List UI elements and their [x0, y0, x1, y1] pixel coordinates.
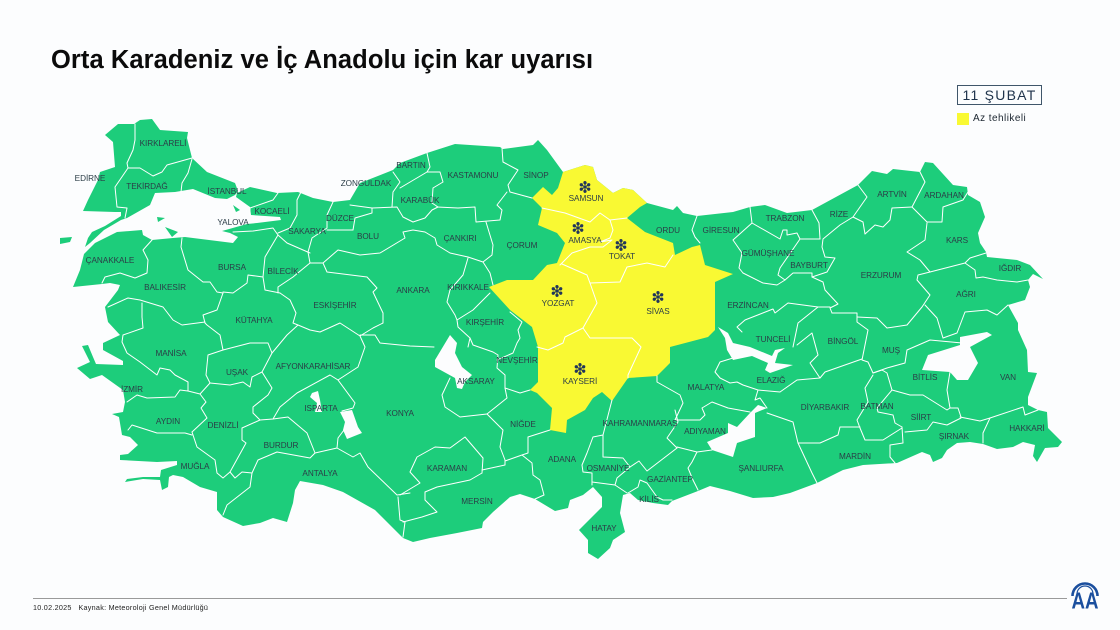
province labels: ŞIRNAK [939, 432, 970, 441]
province labels: BOLU [357, 232, 379, 241]
province labels [75, 138, 1045, 533]
province labels: BATMAN [860, 402, 894, 411]
province labels: SİVAS [646, 306, 670, 316]
province labels: SAMSUN [569, 194, 603, 203]
province borders [102, 124, 1038, 537]
province labels: İSTANBUL [207, 186, 247, 196]
icon: snowflake Yozgat [552, 286, 562, 296]
province labels: AMASYA [568, 236, 602, 245]
province labels: ÇANAKKALE [86, 256, 135, 265]
province labels: ARTVİN [877, 189, 907, 199]
province labels: ERZURUM [861, 271, 902, 280]
province labels: KAYSERİ [563, 376, 597, 386]
province labels: SİİRT [911, 412, 931, 422]
province labels: YALOVA [217, 218, 249, 227]
province labels: MALATYA [688, 383, 725, 392]
province labels: DÜZCE [326, 213, 355, 223]
green landmass: Anatolia [73, 140, 1062, 559]
province labels: ADANA [548, 455, 577, 464]
province labels: DİYARBAKIR [801, 402, 849, 412]
province labels: KÜTAHYA [235, 315, 273, 325]
legend: hazard key: Az tehlikeli [973, 113, 1026, 124]
province labels: BURDUR [264, 441, 298, 450]
province labels: BAYBURT [790, 261, 828, 270]
legend: date box [957, 85, 1042, 105]
province labels: KIRKLARELİ [140, 138, 186, 148]
province labels: MANİSA [155, 348, 187, 358]
province labels: MUŞ [882, 346, 901, 355]
province labels: DENİZLİ [207, 420, 239, 430]
icon: snowflake Kayseri [575, 364, 585, 374]
province labels: ZONGULDAK [341, 179, 392, 188]
province labels: YOZGAT [542, 299, 574, 308]
icon: snowflake Sivas [653, 292, 663, 302]
lake: Tuz [435, 335, 472, 389]
province labels: KIRIKKALE [447, 283, 490, 292]
province labels: OSMANİYE [587, 463, 630, 473]
province labels: ORDU [656, 226, 680, 235]
snowflake icons [552, 182, 663, 374]
province labels: RİZE [830, 209, 849, 219]
province labels: ELAZIĞ [757, 375, 785, 385]
province labels: TEKİRDAĞ [126, 181, 168, 191]
legend: date box: 11 ŞUBAT [962, 87, 1037, 103]
footer rule [33, 598, 1067, 599]
province labels: KARS [946, 236, 969, 245]
province labels: MARDİN [839, 451, 871, 461]
province labels: AFYONKARAHİSAR [276, 361, 351, 371]
province labels: KIRŞEHİR [466, 317, 504, 327]
lake: Beyşehir [340, 410, 362, 439]
province labels: TUNCELİ [756, 334, 790, 344]
province labels: SAKARYA [288, 227, 326, 236]
province labels: ANTALYA [302, 469, 338, 478]
yellow warning region [489, 165, 733, 433]
province labels: AKSARAY [457, 377, 495, 386]
footer: date and source: 10.02.2025 Kaynak: Meteoroloji Genel Müdürlüğü [33, 603, 208, 612]
title: Orta Karadeniz ve İç Anadolu için kar uyarısı [51, 46, 593, 74]
province labels: ANKARA [396, 286, 430, 295]
province labels: VAN [1000, 373, 1016, 382]
province labels: AĞRI [956, 289, 976, 299]
province labels: ARDAHAN [924, 191, 964, 200]
province labels: KOCAELİ [254, 206, 290, 216]
province labels: TOKAT [609, 252, 635, 261]
province labels: HATAY [591, 524, 617, 533]
province labels: KONYA [386, 409, 414, 418]
province labels: BİLECİK [267, 266, 299, 276]
province labels: ERZİNCAN [727, 300, 769, 310]
islands [60, 205, 240, 244]
province labels: KİLİS [639, 494, 659, 504]
icon: snowflake Samsun [580, 182, 590, 192]
province labels: ŞANLIURFA [738, 464, 784, 473]
province labels: AYDIN [156, 417, 180, 426]
province labels: NEVŞEHİR [496, 355, 538, 365]
province labels: ÇORUM [507, 241, 538, 250]
province labels: TRABZON [766, 214, 805, 223]
province labels: HAKKARİ [1009, 423, 1045, 433]
icon: snowflake Amasya [573, 223, 583, 233]
province labels: ISPARTA [304, 404, 338, 413]
province labels: BİNGÖL [828, 336, 859, 346]
province labels: SİNOP [523, 170, 549, 180]
province labels: ÇANKIRI [444, 234, 476, 243]
lake: Keban [718, 327, 793, 373]
province labels: MERSİN [461, 496, 493, 506]
province labels: KAHRAMANMARAŞ [603, 419, 678, 428]
province labels: KARAMAN [427, 464, 467, 473]
province labels: GÜMÜŞHANE [742, 248, 795, 258]
province labels: ESKİŞEHİR [313, 300, 357, 310]
icon: snowflake Tokat [616, 240, 626, 250]
province labels: KASTAMONU [448, 171, 499, 180]
lake: Van [922, 332, 992, 380]
province labels: BALIKESİR [144, 282, 186, 292]
province labels: BURSA [218, 263, 247, 272]
green landmass: Thrace [83, 119, 238, 247]
province labels: UŞAK [226, 368, 249, 377]
province labels: MUĞLA [181, 461, 210, 471]
lake: Atatürk Dam [707, 405, 767, 457]
province labels: GAZİANTEP [647, 474, 694, 484]
province labels: EDİRNE [75, 173, 106, 183]
province labels: ADIYAMAN [684, 427, 726, 436]
province labels: NİĞDE [510, 419, 536, 429]
province labels: İZMİR [121, 384, 143, 394]
province labels: IĞDIR [999, 263, 1021, 273]
province labels: BİTLİS [913, 372, 938, 382]
province labels: KARABÜK [401, 195, 440, 205]
lake: Eğirdir [310, 391, 322, 412]
province labels: BARTIN [396, 161, 426, 170]
lakes [310, 327, 992, 457]
province labels: GİRESUN [703, 225, 740, 235]
